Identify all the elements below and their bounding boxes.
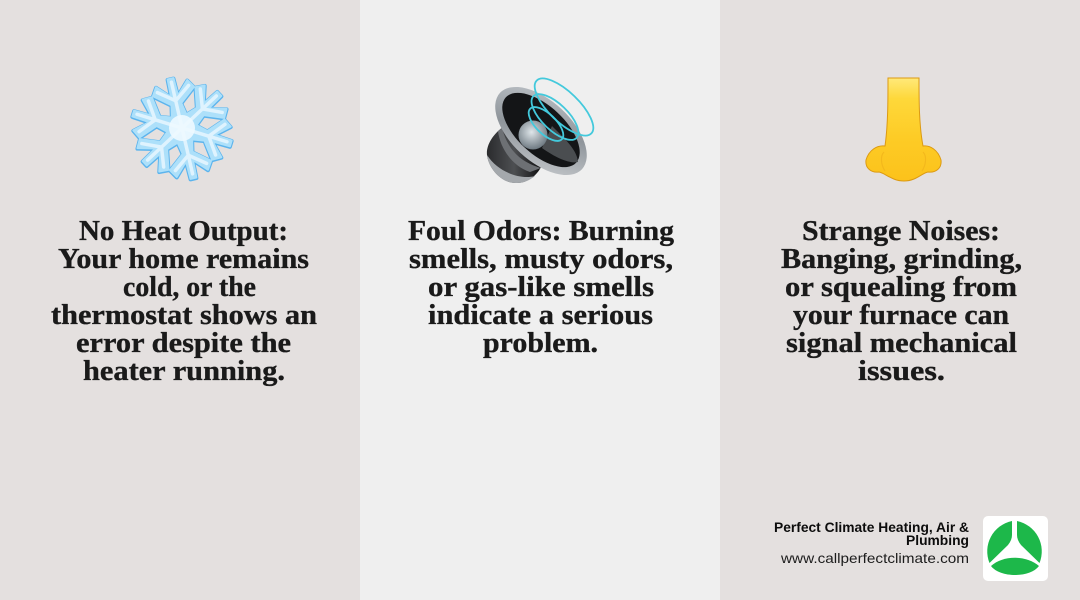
icon: snowflake (117, 67, 247, 191)
panel: right background (720, 0, 1080, 600)
heading: foul odors: smells, musty odors, (409, 243, 673, 275)
heading: strange noises: your furnace can (793, 299, 1009, 331)
heading: no heat output: heater running. (83, 355, 285, 387)
icon: speaker (480, 70, 602, 191)
speaker rim (480, 71, 602, 191)
heading: no heat output: Your home remains (58, 243, 309, 275)
panel: middle background (360, 0, 720, 600)
panel: left background (0, 0, 360, 600)
speaker magnet (487, 127, 541, 183)
heading: strange noises: signal mechanical (786, 327, 1017, 359)
footer: company name and website: Perfect Climate Heating, Air & (774, 520, 969, 535)
speaker dome (518, 120, 548, 150)
heading: foul odors: problem. (483, 327, 598, 359)
footer: company name and website (774, 520, 969, 566)
heading: strange noises: issues. (858, 355, 945, 387)
heading: foul odors: Foul Odors: Burning (408, 215, 675, 247)
sound rings (523, 70, 602, 147)
heading: strange noises: or squealing from (785, 271, 1017, 303)
heading: no heat output: error despite the (76, 327, 291, 359)
heading: no heat output: No Heat Output: (79, 215, 288, 247)
heading: foul odors: or gas-like smells (428, 271, 654, 303)
footer: company name and website: www.callperfectclimate.com (780, 550, 969, 566)
icon: nose (866, 78, 941, 181)
heading: no heat output (51, 215, 317, 387)
heading: foul odors (408, 215, 675, 359)
speaker cone (490, 80, 592, 180)
logo (983, 516, 1048, 581)
heading: strange noises (781, 215, 1022, 387)
heading: no heat output: cold, or the (123, 271, 256, 303)
footer: company name and website: Plumbing (906, 533, 969, 548)
heading: strange noises: Banging, grinding, (781, 243, 1022, 275)
heading: no heat output: thermostat shows an (51, 299, 317, 331)
heading: foul odors: indicate a serious (428, 299, 653, 331)
heading: strange noises: Strange Noises: (802, 215, 1000, 247)
